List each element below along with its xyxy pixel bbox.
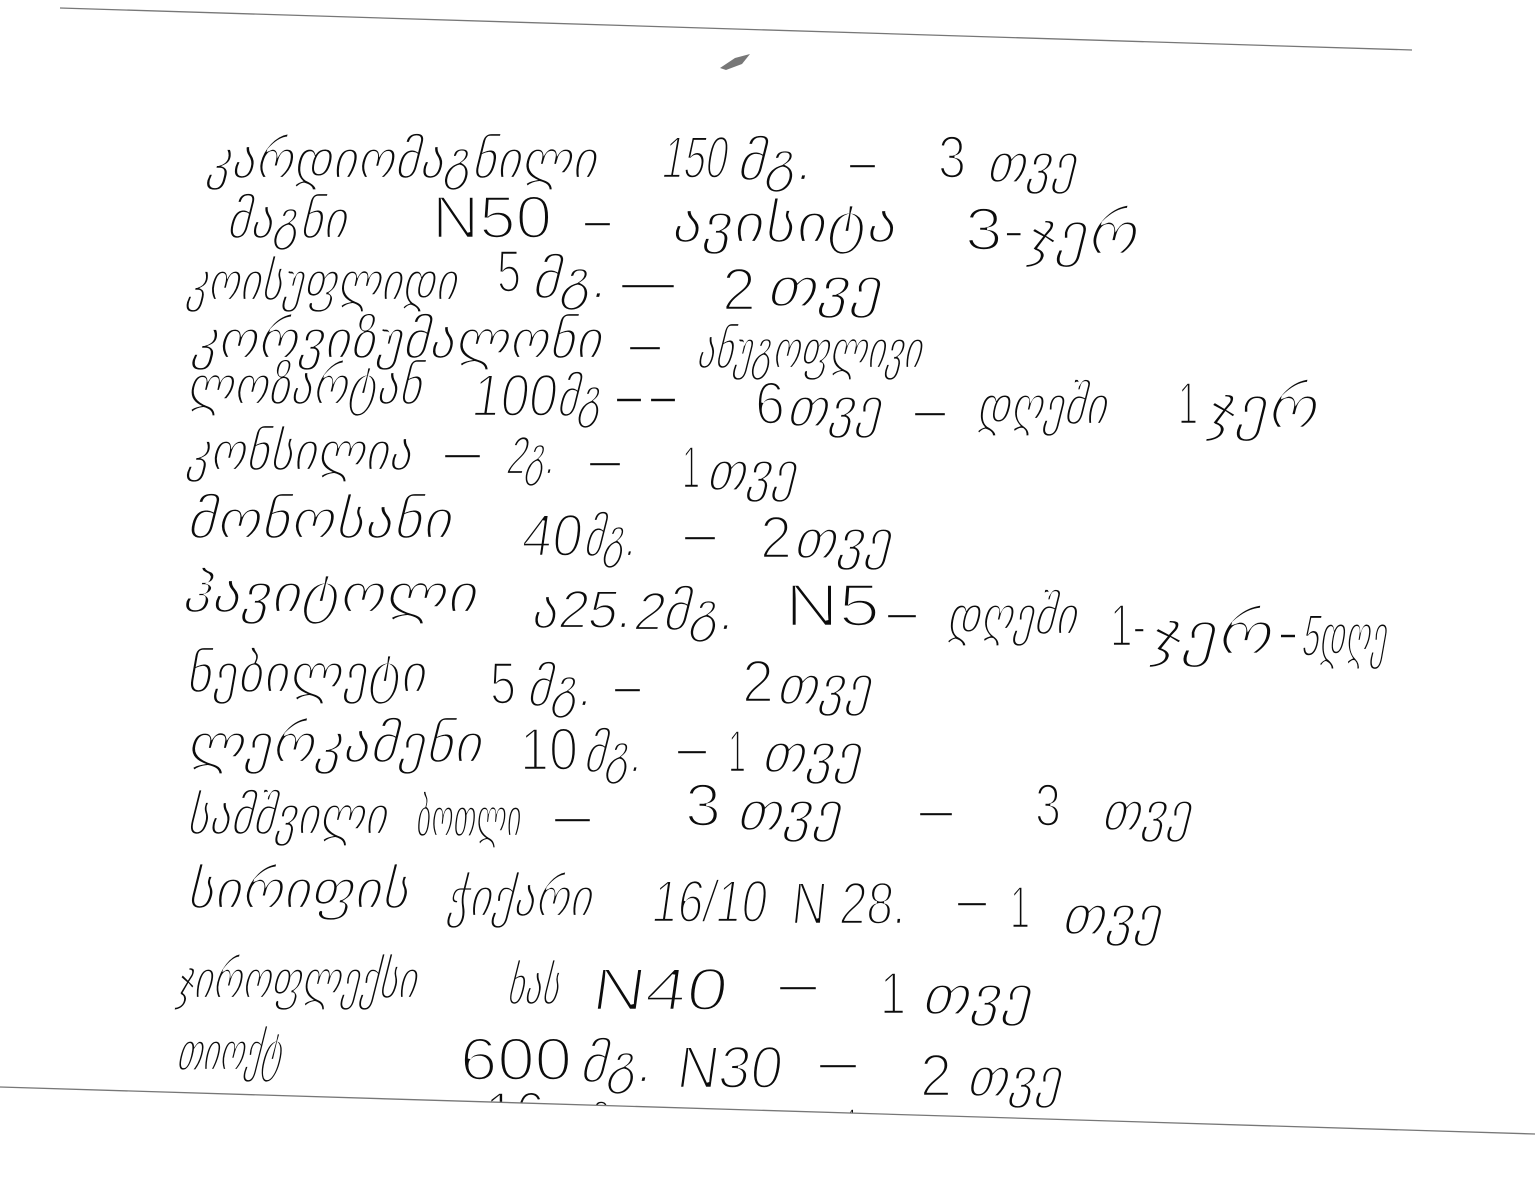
line 11: თვე xyxy=(1097,781,1202,843)
line 5: losartan: დღეში xyxy=(972,375,1117,437)
line 8: 5დღე xyxy=(1298,601,1395,670)
line 5: losartan: -- xyxy=(612,377,680,419)
line 4 xyxy=(187,309,932,381)
line 9: 2 xyxy=(742,648,774,715)
line 7: მონოსანი xyxy=(182,489,462,550)
line 14: thioctic acid: თვე xyxy=(962,1047,1072,1109)
line 1: cardiomagnyl: კარდიომაგნილი xyxy=(202,129,607,191)
line 13 xyxy=(172,949,1042,1027)
line 9: — xyxy=(615,667,640,709)
line 14: thioctic acid xyxy=(172,1021,1072,1109)
line 6: 2გ. xyxy=(502,425,565,487)
line 10: მგ. xyxy=(579,723,652,785)
line 13: თვე xyxy=(917,965,1042,1027)
line 8 xyxy=(177,563,1395,670)
line 6: კონსილია xyxy=(182,421,422,483)
line 6: — xyxy=(445,433,480,475)
line 10 xyxy=(182,713,872,785)
line 9: მგ. xyxy=(522,657,602,719)
line 12: თვე xyxy=(1057,885,1172,947)
line 2: ჯერ xyxy=(1022,200,1149,268)
line 5: losartan: 100 xyxy=(468,361,563,429)
line 10: თვე xyxy=(757,723,872,785)
line 10: ლერკამენი xyxy=(182,713,492,775)
line 5: losartan: 6 xyxy=(755,370,785,437)
line 12: N 28. xyxy=(789,870,911,937)
line 2: N50 xyxy=(432,184,552,251)
line 5: losartan: მგ xyxy=(552,367,612,429)
line 12: — xyxy=(958,881,986,923)
line 1: cardiomagnyl: — xyxy=(850,143,875,185)
line 3: თვე xyxy=(762,257,892,319)
cut-off line fragments: 16 xyxy=(485,1080,545,1147)
line 2 xyxy=(222,184,1149,268)
line 2: ავისიტა xyxy=(668,193,904,255)
line 14: thioctic acid: მგ. xyxy=(575,1033,662,1095)
line 8: N5 xyxy=(785,572,880,639)
line 1: cardiomagnyl: 150 xyxy=(658,123,735,191)
line 3: 2 xyxy=(722,256,756,323)
line 5: losartan: თვე xyxy=(782,377,892,439)
line 7: თვე xyxy=(789,509,902,571)
cut-off line fragments: გ xyxy=(590,1080,614,1148)
line 9: 5 xyxy=(490,650,516,717)
line 9 xyxy=(183,643,882,719)
line 11: სამშვილი xyxy=(182,785,397,847)
line 8: 1- xyxy=(1110,592,1146,659)
line 7: 2 xyxy=(760,504,792,571)
line 14: thioctic acid: — xyxy=(820,1043,856,1085)
line 1: cardiomagnyl xyxy=(202,123,1087,195)
line 8: — xyxy=(888,593,916,635)
line 7: 40 xyxy=(518,501,588,569)
line 2: მაგნი xyxy=(222,189,357,251)
line 10: 10 xyxy=(520,716,578,783)
line 2: 3- xyxy=(965,196,1025,263)
line 11: ბოთლი xyxy=(414,788,525,849)
line 12: 16/10 xyxy=(648,867,773,935)
line 14: thioctic acid: თიოქტ xyxy=(172,1021,292,1083)
line 10: 1 xyxy=(728,718,746,785)
line 13: ჯიროფლექსი xyxy=(172,949,427,1011)
line 13: ხას xyxy=(502,955,569,1016)
line 3 xyxy=(182,238,892,323)
line 7: მგ. xyxy=(579,507,646,569)
line 6: — xyxy=(590,441,620,483)
line 2: — xyxy=(585,201,610,243)
line 6: თვე xyxy=(702,441,807,503)
line 1: cardiomagnyl: მგ. xyxy=(732,131,822,193)
line 11: — xyxy=(920,791,952,833)
line 7 xyxy=(182,489,902,571)
line 8: ჰავიტოლი xyxy=(177,563,487,625)
line 8: დღეში xyxy=(942,585,1087,647)
line 11: თვე xyxy=(732,781,852,843)
line 11: — xyxy=(555,797,590,839)
blank area below page edge xyxy=(0,1087,1535,1194)
line 6: 1 xyxy=(682,434,700,501)
line 3: კოისუფლიდი xyxy=(182,251,467,313)
line 9: ნებილეტი xyxy=(183,643,434,705)
text: 1 xyxy=(845,1096,859,1163)
line 1: cardiomagnyl: 3 xyxy=(938,124,966,191)
line 14: thioctic acid: 600 xyxy=(460,1026,572,1093)
ink smudge xyxy=(720,54,750,70)
line 5: losartan: ჯერ xyxy=(1202,374,1329,442)
line 9: თვე xyxy=(772,655,882,717)
line 5: losartan xyxy=(182,355,1329,442)
line 12: ჭიქარი xyxy=(442,867,602,929)
line 5: losartan: 1 xyxy=(1178,370,1198,437)
line 12: სირიფის xyxy=(182,859,419,921)
cut-off line fragments xyxy=(485,1080,859,1163)
line 3: მგ. xyxy=(527,249,617,311)
line 14: thioctic acid: N30 xyxy=(673,1033,788,1101)
line 10: — xyxy=(678,729,706,771)
line 4: კორვიზუმალონი xyxy=(187,309,612,371)
line 13: 1 xyxy=(880,960,906,1027)
line 11: 3 xyxy=(1035,772,1061,839)
line 14: thioctic acid: 2 xyxy=(920,1042,952,1109)
line 4: ანუგოფლივი xyxy=(692,319,932,381)
line 3: 5 xyxy=(497,238,521,305)
line 7: — xyxy=(685,515,715,557)
line 5: losartan: ლოზარტან xyxy=(182,355,432,417)
line 3: — xyxy=(622,263,674,305)
line 11 xyxy=(182,772,1202,849)
line 8: ა25. xyxy=(528,579,639,640)
line 8: - xyxy=(1278,613,1298,655)
line 1: cardiomagnyl: თვე xyxy=(982,133,1087,195)
line 11: 3 xyxy=(685,772,721,839)
line 13: — xyxy=(780,965,816,1007)
line 4: — xyxy=(630,325,660,367)
line 8: ჯერ xyxy=(1145,600,1284,668)
line 8: 2მგ. xyxy=(629,581,744,643)
line 13: N40 xyxy=(588,955,733,1023)
bottom scan edge line xyxy=(0,1087,1535,1134)
line 12: 1 xyxy=(1010,874,1030,941)
line 12 xyxy=(182,859,1172,947)
line 5: losartan: — xyxy=(915,391,945,433)
line 6 xyxy=(182,421,807,503)
top scan edge line xyxy=(60,8,1412,50)
